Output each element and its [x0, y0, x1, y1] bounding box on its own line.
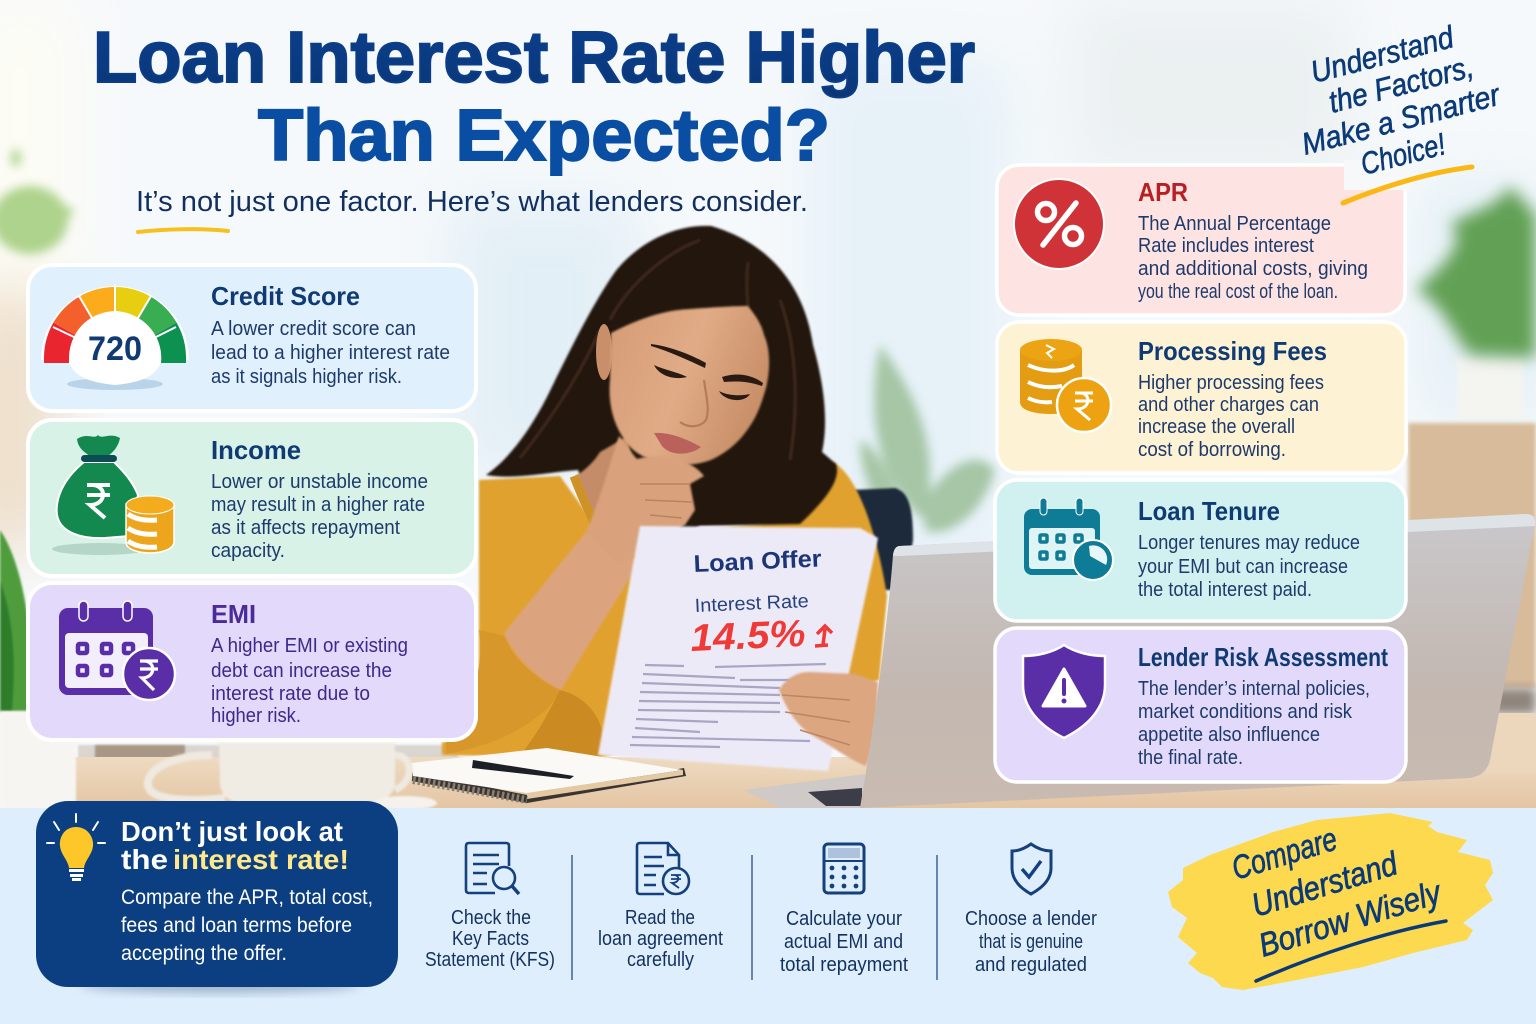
- callout body: Compare the APR, total cost,: [121, 886, 373, 909]
- heading: credit score: Credit Score: [211, 281, 360, 311]
- document lines: [630, 664, 826, 747]
- tip text: Key Facts: [452, 928, 529, 950]
- tip: read the loan agreement: [598, 843, 723, 971]
- text: loan tenure description: the total interest paid.: [1138, 579, 1312, 601]
- heading: loan offer: Loan Offer: [693, 545, 822, 578]
- face: [610, 306, 769, 465]
- yellow brush callout: Compare: [1227, 820, 1341, 887]
- text: income description: Lower or unstable income: [211, 471, 428, 493]
- text: processing fees description: Higher processing fees: [1138, 372, 1324, 394]
- callout heading: [121, 816, 349, 875]
- text: processing fees description: increase the overall: [1138, 416, 1295, 438]
- heading: lender risk assessment: Lender Risk Assessment: [1138, 642, 1388, 672]
- ear: [596, 324, 612, 380]
- tip text: that is genuine: [979, 931, 1083, 953]
- heading: processing fees: Processing Fees: [1138, 336, 1327, 366]
- text: credit score description: A lower credit score can: [211, 318, 416, 340]
- handwritten note: Make a Smarter: [1298, 77, 1505, 162]
- title line one: Loan Interest Rate Higher: [93, 18, 975, 98]
- callout body: [121, 886, 373, 965]
- heading: APR: APR: [1138, 177, 1188, 207]
- tip text: loan agreement: [598, 928, 723, 950]
- yellow brush callout: [1168, 813, 1493, 990]
- panel: APR: [997, 160, 1410, 315]
- yellow brush callout: Borrow Wisely: [1254, 873, 1447, 964]
- tip text: actual EMI and: [784, 931, 903, 953]
- handwritten note: the Factors,: [1325, 49, 1477, 120]
- icon: percent circle: [1014, 179, 1104, 269]
- callout body: fees and loan terms before: [121, 914, 352, 937]
- sweater: [442, 462, 887, 758]
- subtitle underline: [138, 229, 228, 232]
- bottom band: [0, 808, 1536, 1024]
- hair: [486, 226, 837, 560]
- panel: EMI: [28, 583, 476, 740]
- label: interest rate: Interest Rate: [694, 591, 809, 617]
- text: lender risk description: [1138, 678, 1370, 769]
- text: lender risk description: appetite also influence: [1138, 724, 1320, 746]
- icon: credit gauge 720: 720: [88, 330, 142, 368]
- text: income description: as it affects repayment: [211, 517, 400, 539]
- text: loan tenure description: Longer tenures may reduce: [1138, 532, 1360, 554]
- note backdrop over card corner: [1344, 160, 1410, 190]
- white pot bottom left: [0, 711, 76, 809]
- text: EMI description: [211, 635, 408, 727]
- nose: [680, 380, 708, 426]
- icon: up arrow: [815, 626, 832, 646]
- tip text: [425, 907, 555, 971]
- tip text: Calculate your: [786, 908, 902, 930]
- text: income description: may result in a higher rate: [211, 494, 425, 516]
- text: lender risk description: market conditions and risk: [1138, 701, 1353, 723]
- left plant: [0, 530, 30, 712]
- handwritten note: Understand: [1307, 19, 1459, 90]
- panel: loan tenure: [995, 480, 1406, 621]
- text: credit score description: as it signals higher risk.: [211, 366, 402, 388]
- tip: calculate EMI and repayment: [780, 844, 908, 976]
- callout body: accepting the offer.: [121, 942, 287, 965]
- text: income description: [211, 471, 428, 562]
- tip text: Statement (KFS): [425, 949, 555, 971]
- tip text: [780, 908, 908, 976]
- text: EMI description: A higher EMI or existing: [211, 635, 408, 657]
- note underline: [1343, 167, 1472, 203]
- finger lines: [640, 484, 692, 518]
- tip text: Choose a lender: [965, 908, 1097, 930]
- icon: document with rupee: [637, 843, 689, 894]
- icon: money bag and coins: [52, 435, 174, 555]
- blurred plant centre: [860, 345, 995, 532]
- background office scene: [0, 0, 1536, 810]
- tip text: [965, 908, 1097, 976]
- icon: calculator: [824, 844, 864, 893]
- eyes: [654, 365, 687, 378]
- text: income description: capacity.: [211, 540, 285, 562]
- text: processing fees description: and other charges can: [1138, 394, 1319, 416]
- icon: document with magnifier: [466, 843, 519, 894]
- hand on chin: [586, 436, 704, 566]
- icon: coin stack with rupee: [1020, 339, 1111, 432]
- text: credit score description: [211, 318, 450, 388]
- callout heading: interest rate!: [173, 844, 349, 875]
- icon: warning shield: [1023, 645, 1105, 738]
- icon: EMI calendar with rupee: [59, 601, 175, 700]
- raised forearm: [504, 532, 640, 690]
- text: APR description: Rate includes interest: [1138, 235, 1314, 257]
- icon: shield check: [1012, 844, 1051, 894]
- tip: choose a genuine lender: [965, 844, 1097, 976]
- blurred plant top left: [0, 149, 74, 254]
- callout heading: the: [121, 844, 168, 875]
- yellow brush callout: Understand: [1247, 844, 1403, 924]
- panel: credit score: [28, 265, 476, 411]
- tip text: carefully: [627, 949, 694, 971]
- tip: check the key facts statement: [425, 843, 555, 971]
- tip text: Check the: [451, 907, 531, 929]
- notebook and pen: [411, 748, 686, 803]
- icon: calendar with clock: [1024, 498, 1113, 580]
- panel: processing fees: [997, 322, 1406, 473]
- text: lender risk description: the final rate.: [1138, 747, 1243, 769]
- tip text: total repayment: [780, 954, 908, 976]
- tip text: Read the: [625, 907, 695, 929]
- back wall band: [78, 745, 458, 759]
- callout heading: Don’t just look at: [121, 816, 343, 847]
- hair highlights: [520, 240, 795, 460]
- value: 14.5 percent up: 14.5%: [690, 613, 806, 660]
- lips: [654, 433, 701, 454]
- panel: don't just look at the interest rate: [36, 801, 398, 993]
- handwritten note: [1298, 19, 1505, 182]
- paper: loan offer: [598, 526, 878, 771]
- title line two: Than Expected?: [258, 96, 830, 176]
- text: loan tenure description: your EMI but can increase: [1138, 556, 1348, 578]
- coffee cup: [148, 743, 437, 810]
- holding hand: [779, 672, 878, 766]
- laptop: [744, 514, 1535, 808]
- text: EMI description: higher risk.: [211, 705, 301, 727]
- text: APR description: [1138, 213, 1368, 303]
- text: APR description: and additional costs, giving: [1138, 258, 1368, 280]
- title: [93, 18, 975, 176]
- text: APR description: you the real cost of the loan.: [1138, 281, 1338, 303]
- text: credit score description: lead to a higher interest rate: [211, 342, 450, 364]
- eyebrows: [651, 344, 706, 368]
- heading: income: Income: [211, 435, 301, 465]
- heading: EMI: EMI: [211, 599, 256, 629]
- panel: income: [28, 420, 476, 576]
- text: EMI description: debt can increase the: [211, 660, 392, 682]
- neck: [576, 436, 642, 558]
- text: lender risk description: The lender’s internal policies,: [1138, 678, 1370, 700]
- text: processing fees description: cost of borrowing.: [1138, 439, 1286, 461]
- text: processing fees description: [1138, 372, 1324, 461]
- desk: [70, 757, 1536, 809]
- icon: credit gauge 720: [53, 285, 176, 390]
- text: EMI description: interest rate due to: [211, 683, 370, 705]
- text: APR description: The Annual Percentage: [1138, 213, 1331, 235]
- photo: worried woman reading a loan offer: [148, 226, 1535, 810]
- chair: [850, 488, 913, 590]
- icon: light bulb: [47, 814, 105, 881]
- tip text: [598, 907, 723, 971]
- collar rib: [574, 476, 614, 560]
- handwritten note: Choice!: [1357, 126, 1449, 182]
- heading: loan tenure: Loan Tenure: [1138, 496, 1280, 526]
- panel: lender risk assessment: [995, 628, 1406, 782]
- tip text: and regulated: [975, 954, 1087, 976]
- text: loan tenure description: [1138, 532, 1360, 601]
- subtitle: It’s not just one factor. Here’s what lenders consider.: [136, 186, 808, 218]
- blurred shelf and plant right: [1408, 186, 1536, 714]
